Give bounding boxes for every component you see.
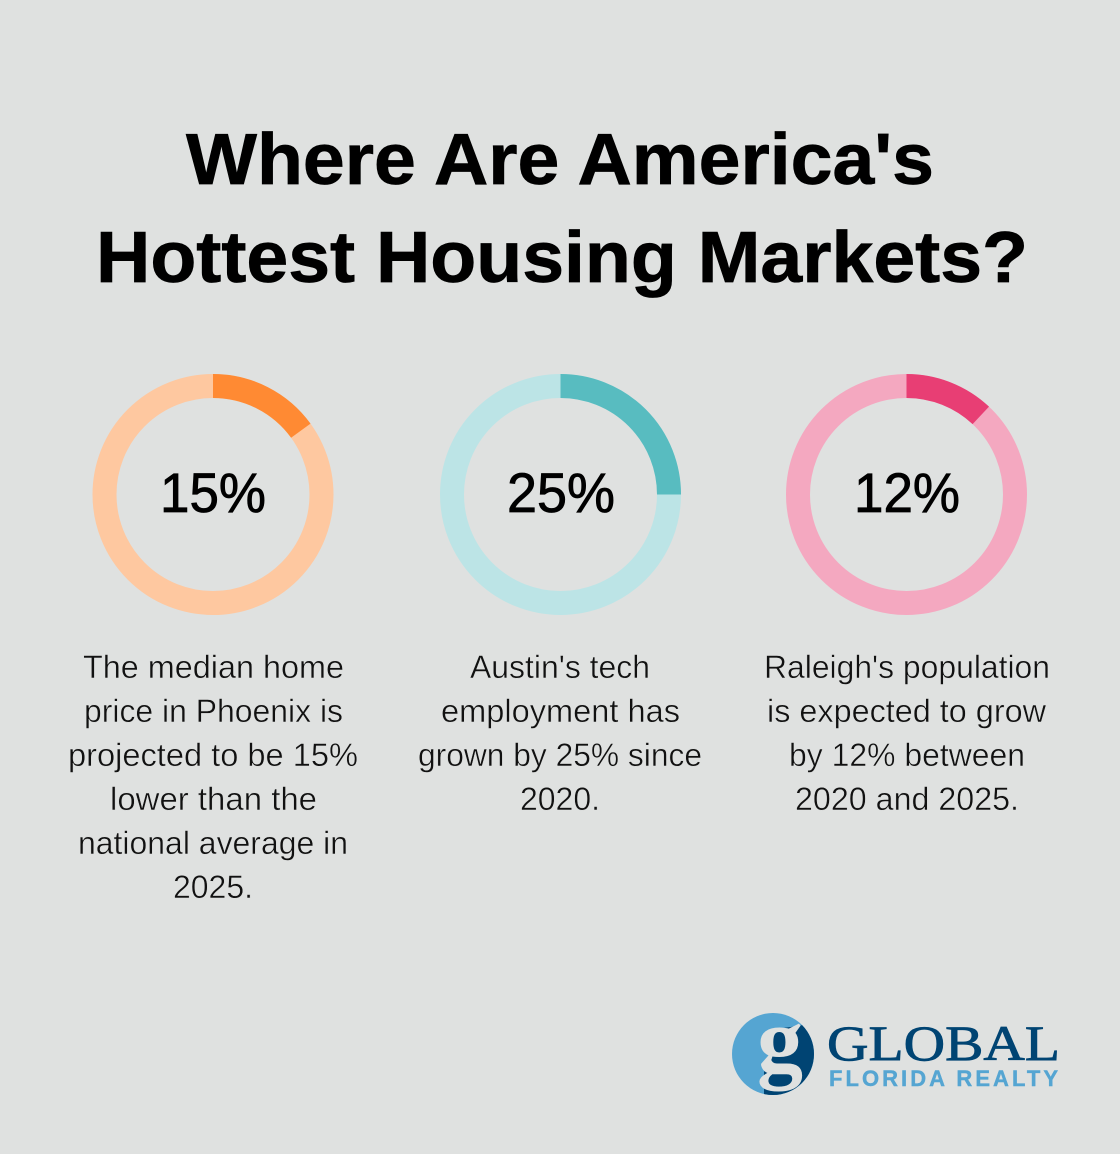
donut chart: 25%	[452, 386, 669, 603]
text block: Raleigh description: is expected to grow	[767, 693, 1047, 729]
title: Where Are America's	[186, 120, 934, 200]
panel: Raleigh stat	[764, 386, 1050, 817]
text block: Raleigh description: 2020 and 2025.	[795, 781, 1019, 817]
text block: Phoenix description: lower than the	[110, 781, 317, 817]
text block: Austin description	[418, 649, 702, 817]
text block: Phoenix description	[68, 649, 358, 905]
title: Hottest Housing Markets?	[96, 218, 1028, 298]
text block: Austin description: employment has	[441, 693, 680, 729]
text block: Raleigh description: Raleigh's population	[764, 649, 1050, 685]
text block: Austin description: grown by 25% since	[418, 737, 702, 773]
icon: logo emblem: g	[757, 989, 803, 1091]
text block: Phoenix description: price in Phoenix is	[84, 693, 343, 729]
text block: Phoenix description: The median home	[83, 649, 344, 685]
text block: Raleigh description	[764, 649, 1050, 817]
text block: Phoenix description: projected to be 15%	[68, 737, 358, 773]
text block: Phoenix description: national average in	[78, 825, 348, 861]
text block: Austin description: Austin's tech	[470, 649, 650, 685]
logo wordmark: GLOBAL: GLOBAL	[827, 1015, 1060, 1071]
logo: Global Florida Realty	[732, 1013, 1058, 1095]
value: 15%: 15%	[160, 461, 266, 524]
value: 25%: 25%	[507, 461, 615, 524]
value: 12%: 12%	[854, 461, 960, 524]
icon: logo emblem	[732, 1013, 814, 1095]
panel: Austin stat	[418, 386, 702, 817]
title	[96, 120, 1028, 298]
text block: Austin description: 2020.	[520, 781, 600, 817]
donut chart: 12%	[798, 386, 1015, 603]
logo wordmark: FLORIDA REALTY: FLORIDA REALTY	[829, 1066, 1058, 1091]
donut chart: 15%	[104, 386, 322, 603]
text block: Raleigh description: by 12% between	[789, 737, 1025, 773]
panel: Phoenix stat	[68, 386, 358, 905]
text block: Phoenix description: 2025.	[173, 869, 253, 905]
